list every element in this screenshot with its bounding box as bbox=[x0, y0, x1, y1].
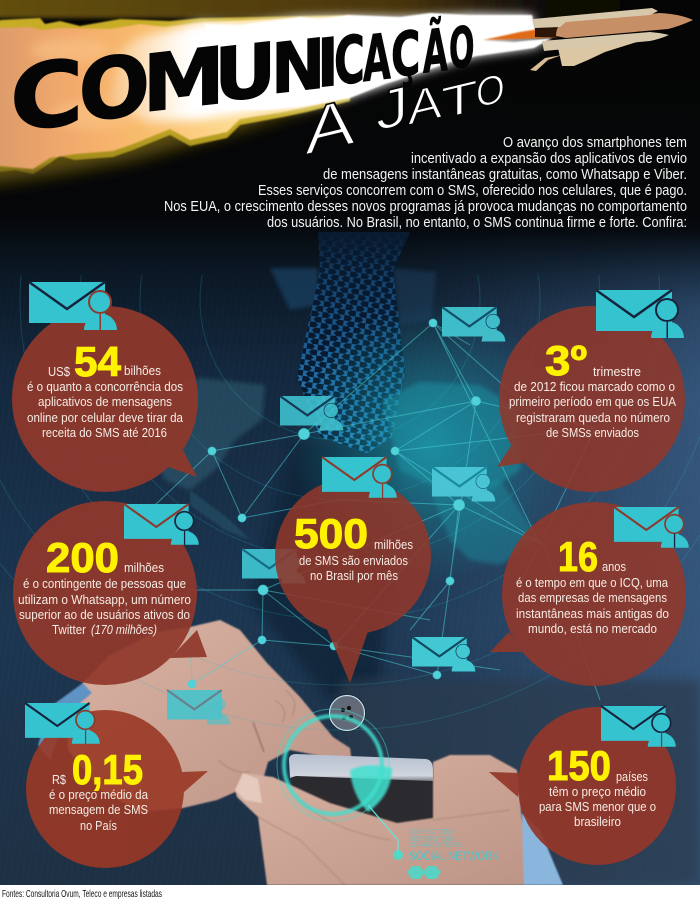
envelope icon bbox=[412, 637, 475, 672]
bubble: 200 milhões bbox=[13, 501, 207, 685]
right shirt cuff bbox=[522, 813, 563, 885]
phone hologram: DISTRIBUTIONS bbox=[409, 836, 456, 843]
figure: 200 bbox=[46, 534, 119, 581]
caption: brasileiro bbox=[574, 814, 621, 829]
pointing hand bbox=[38, 620, 352, 812]
figure bbox=[46, 534, 164, 581]
intro text bbox=[164, 134, 687, 231]
icon: envelope bbox=[614, 507, 689, 548]
caption: de SMSs enviados bbox=[546, 425, 639, 440]
bubble shape bbox=[497, 306, 685, 492]
title: A JATO: A bbox=[408, 74, 442, 136]
bubble: 150 países bbox=[489, 706, 676, 865]
figure: 16 bbox=[558, 533, 598, 580]
flame clouds bbox=[30, 38, 140, 129]
necktie bbox=[297, 232, 410, 453]
icon: envelope bbox=[25, 703, 100, 744]
caption: aplicativos de mensagens bbox=[38, 394, 172, 409]
small envelope icons on network bbox=[167, 307, 505, 725]
flame white core bbox=[110, 14, 552, 122]
caption: no Brasil por mês bbox=[310, 568, 398, 583]
caption bbox=[49, 787, 149, 833]
title: COMUNICAÇÃO: C bbox=[334, 21, 365, 100]
figure: trimestre bbox=[593, 364, 641, 379]
bubble shape bbox=[26, 710, 208, 868]
envelope icon bbox=[442, 307, 505, 342]
envelope icon bbox=[280, 396, 343, 431]
globe arcs bbox=[0, 275, 700, 730]
bubble: 500 milhões bbox=[275, 457, 431, 683]
bubble: 16 anos bbox=[490, 502, 689, 686]
bubble shape bbox=[13, 501, 207, 685]
left shirt cuff bbox=[38, 683, 92, 760]
figure bbox=[545, 337, 641, 384]
bubble: R$ 0,15 bbox=[25, 703, 208, 868]
caption: receita do SMS até 2016 bbox=[42, 425, 167, 440]
caption: (170 milhões) bbox=[91, 622, 157, 637]
bubble shape bbox=[489, 707, 676, 865]
figure bbox=[558, 533, 626, 580]
title: COMUNICAÇÃO: C bbox=[10, 41, 83, 153]
figure: 54 bbox=[74, 338, 122, 385]
icon: envelope bbox=[601, 706, 676, 747]
rocket upper booster bbox=[533, 8, 658, 28]
envelope icon bbox=[167, 690, 230, 725]
caption: de 2012 ficou marcado como o bbox=[514, 379, 675, 394]
sources footer bbox=[0, 885, 700, 900]
title: COMUNICAÇÃO: U bbox=[214, 26, 277, 119]
figure: milhões bbox=[124, 560, 164, 575]
bubble: 3º trimestre bbox=[497, 290, 685, 492]
rocket orbiter bbox=[558, 41, 640, 66]
caption: de SMS são enviados bbox=[299, 553, 408, 568]
caption: mensagem de SMS bbox=[49, 802, 148, 817]
bubble shape bbox=[490, 502, 686, 686]
title: COMUNICAÇÃO: A bbox=[363, 20, 391, 97]
bubble shape bbox=[12, 306, 198, 492]
caption bbox=[509, 379, 676, 440]
phone hologram: SOCIAL NETWORK bbox=[409, 849, 499, 863]
title: COMUNICAÇÃO: Ç bbox=[391, 18, 420, 92]
figure bbox=[48, 338, 161, 385]
icon: envelope bbox=[322, 457, 397, 498]
caption: superior ao de usuários ativos do bbox=[19, 607, 190, 622]
figure: anos bbox=[602, 559, 626, 574]
caption: é o preço médio da bbox=[49, 787, 149, 802]
figure bbox=[294, 510, 413, 557]
caption: online por celular deve tirar da bbox=[27, 410, 184, 425]
caption: é o quanto a concorrência dos bbox=[27, 379, 183, 394]
figure: milhões bbox=[374, 537, 413, 552]
figure: 3º bbox=[545, 337, 587, 384]
rocket lower booster bbox=[542, 32, 669, 51]
rocket bbox=[530, 8, 693, 71]
network lines and nodes bbox=[155, 319, 600, 700]
title: COMUNICAÇÃO: O bbox=[79, 35, 150, 141]
caption: para SMS menor que o bbox=[539, 799, 656, 814]
title: COMUNICAÇÃO: O bbox=[449, 13, 474, 83]
title: A JATO: O bbox=[476, 65, 505, 117]
flame soft lower glow bbox=[0, 80, 347, 185]
figure: 500 bbox=[294, 510, 368, 557]
rocket tank bbox=[556, 13, 693, 38]
figure: 0,15 bbox=[72, 746, 143, 793]
figure bbox=[547, 742, 648, 789]
flame orange body bbox=[0, 16, 350, 169]
icon: envelope bbox=[596, 290, 684, 338]
figure: bilhões bbox=[124, 363, 161, 378]
caption: têm o preço médio bbox=[549, 784, 646, 799]
title: A JATO: J bbox=[376, 74, 409, 143]
figure: países bbox=[616, 769, 648, 784]
figure: R$ bbox=[52, 772, 67, 787]
caption: Twitter bbox=[52, 622, 87, 637]
icon: envelope bbox=[124, 504, 199, 545]
smartphone bbox=[289, 754, 433, 825]
phone hologram: ORGANIZATIONS bbox=[409, 842, 461, 849]
title: COMUNICAÇÃO: N bbox=[271, 24, 325, 110]
caption: instantâneas mais antigas do bbox=[516, 606, 669, 621]
bubble: US$ 54 bilhões bbox=[12, 282, 198, 492]
caption: das empresas de mensagens bbox=[518, 590, 667, 605]
caption bbox=[516, 575, 669, 636]
caption: no País bbox=[80, 818, 117, 833]
figure bbox=[52, 746, 143, 793]
caption bbox=[27, 379, 184, 440]
bubble shape bbox=[275, 478, 431, 683]
caption: mundo, está no mercado bbox=[528, 621, 657, 636]
title: A JATO: T bbox=[441, 71, 478, 129]
figure: US$ bbox=[48, 364, 71, 379]
world map bbox=[140, 305, 570, 585]
caption bbox=[18, 576, 191, 637]
caption bbox=[539, 784, 656, 829]
caption: utilizam o Whatsapp, um número bbox=[18, 592, 191, 607]
jacket button bbox=[328, 694, 366, 732]
holding hand bbox=[235, 755, 563, 885]
title: COMUNICAÇÃO: M bbox=[142, 31, 225, 131]
phone hologram bbox=[277, 709, 499, 879]
title: COMUNICAÇÃO: Ã bbox=[423, 14, 448, 88]
orange exhaust tongue bbox=[483, 26, 557, 40]
caption: é o contingente de pessoas que bbox=[23, 576, 186, 591]
caption: registraram queda no número bbox=[516, 410, 670, 425]
title: COMUNICAÇÃO bbox=[10, 13, 474, 153]
title: A JATO bbox=[305, 65, 505, 170]
caption: primeiro período em que os EUA bbox=[509, 394, 676, 409]
title: A JATO: A bbox=[305, 84, 355, 170]
rocket fin bbox=[530, 55, 562, 71]
title: COMUNICAÇÃO: I bbox=[317, 23, 339, 103]
caption bbox=[299, 553, 408, 583]
top flame band bbox=[0, 0, 620, 185]
caption: é o tempo em que o ICQ, uma bbox=[516, 575, 669, 590]
hologram labels: CONNECTIONS bbox=[409, 829, 454, 836]
envelope icon bbox=[242, 549, 305, 584]
flame olive edge bbox=[0, 15, 350, 174]
envelope icon bbox=[432, 467, 495, 502]
icon: envelope bbox=[29, 282, 117, 330]
figure: 150 bbox=[547, 742, 611, 789]
sources footer: Fontes: Consultoria Ovum, Teleco e empresas listadas bbox=[2, 888, 162, 900]
